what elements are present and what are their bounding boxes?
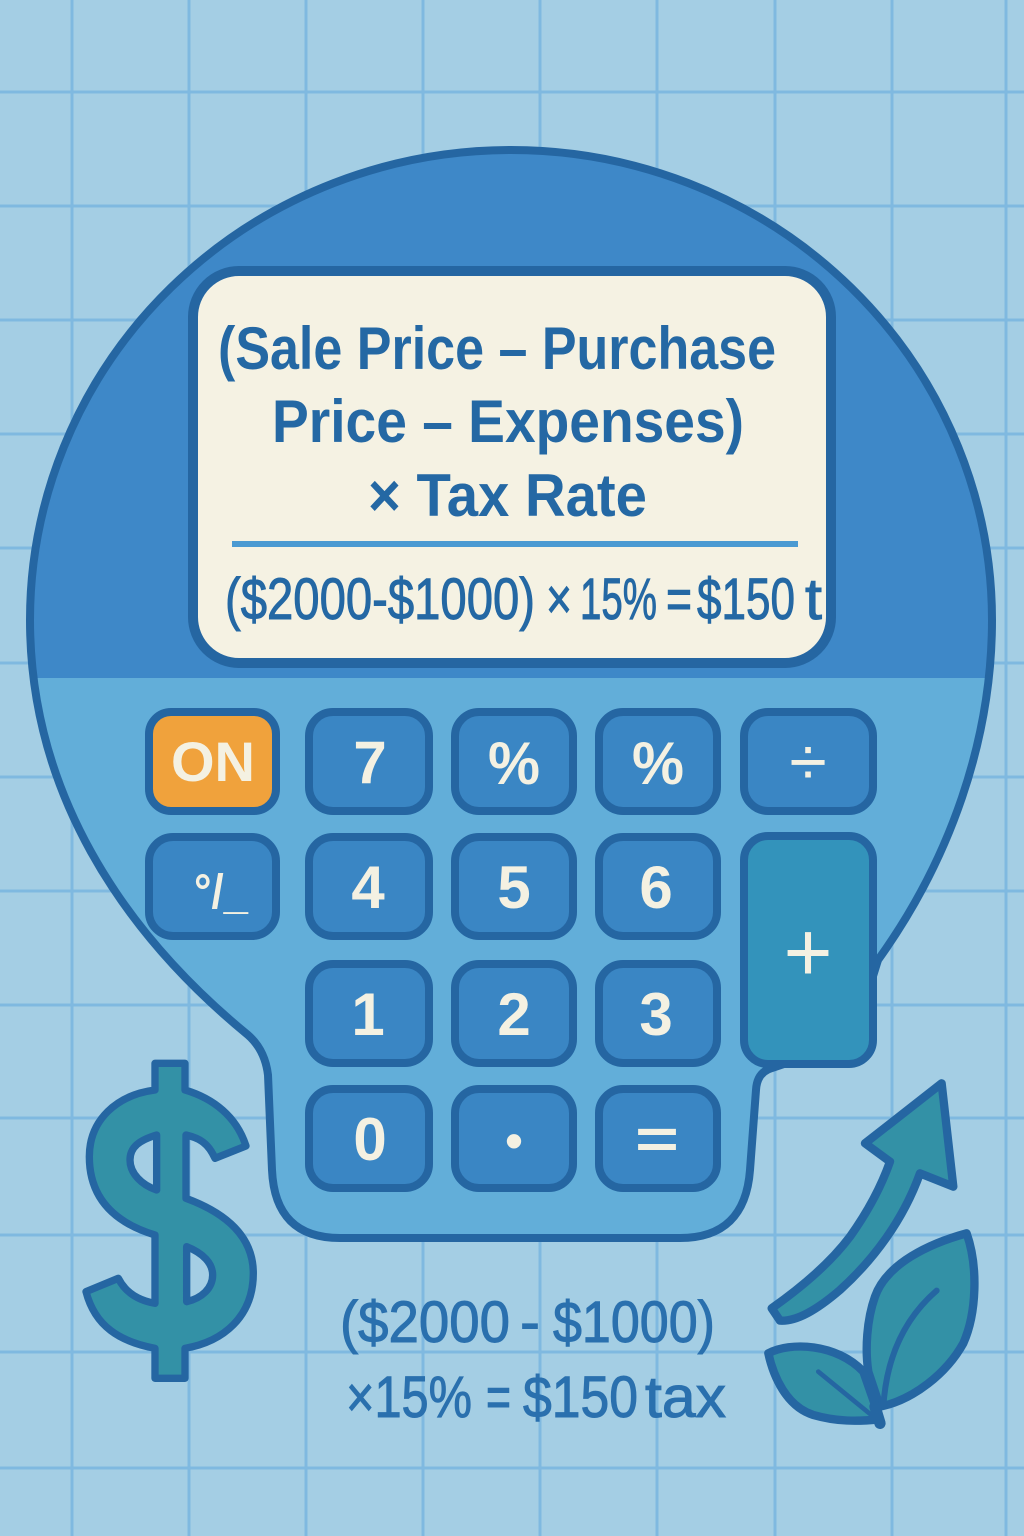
key: 4 (309, 837, 429, 936)
key: 1: 1 (351, 981, 385, 1048)
key: ON: ON (171, 730, 255, 793)
key: plus: + (783, 905, 833, 999)
key: 6: 6 (639, 854, 673, 921)
worked example on screen: × (546, 567, 572, 632)
example calculation: tax (645, 1365, 726, 1430)
example calculation: - (520, 1290, 540, 1355)
key: equals (599, 1089, 717, 1188)
icon: leaves (768, 1233, 974, 1423)
key: 4: 4 (351, 854, 385, 921)
key: 1 (309, 964, 429, 1063)
key: percent: % (632, 730, 684, 797)
example calculation: $1000) (553, 1290, 715, 1355)
example calculation: ×15% (346, 1365, 472, 1430)
key: sign: °/_ (194, 866, 249, 919)
worked example on screen (225, 567, 822, 632)
key: divide (744, 712, 873, 811)
key: 0: 0 (353, 1106, 387, 1173)
key: 3 (599, 964, 717, 1063)
calculator body (30, 150, 992, 1238)
key: decimal point: • (505, 1113, 523, 1169)
worked example on screen: $150 (697, 567, 795, 632)
key: 0 (309, 1089, 429, 1188)
key: 5 (455, 837, 573, 936)
key: 5: 5 (497, 854, 531, 921)
worked example on screen: t (805, 567, 822, 632)
key: sign (149, 837, 276, 936)
icon: dollar sign (86, 1063, 253, 1378)
display screen (193, 271, 831, 663)
key: percent (455, 712, 573, 811)
worked example on screen: ($2000-$1000) (225, 567, 535, 632)
formula text: × Tax Rate (368, 462, 647, 529)
formula text (218, 315, 776, 529)
worked example on screen: = (666, 567, 692, 632)
key: 7: 7 (353, 729, 387, 796)
formula text: Price – Expenses) (272, 388, 744, 455)
key: percent (599, 712, 717, 811)
key: 2: 2 (497, 981, 531, 1048)
key: ON (149, 712, 276, 811)
keypad (149, 712, 873, 1188)
example calculation (340, 1290, 726, 1430)
icon: growth arrow (772, 1083, 953, 1321)
key: 6 (599, 837, 717, 936)
example calculation: $150 (523, 1365, 638, 1430)
key: plus (744, 836, 873, 1064)
key: 7 (309, 712, 429, 811)
key: equals: = (635, 1107, 679, 1170)
worked example on screen: 15% (580, 567, 657, 632)
formula text: (Sale Price – Purchase (218, 315, 776, 382)
key: 3: 3 (639, 981, 673, 1048)
key: percent: % (488, 730, 540, 797)
key: divide: ÷ (789, 724, 827, 800)
key: 2 (455, 964, 573, 1063)
key: decimal point (455, 1089, 573, 1188)
example calculation: ($2000 (340, 1290, 510, 1355)
example calculation: = (486, 1365, 511, 1430)
